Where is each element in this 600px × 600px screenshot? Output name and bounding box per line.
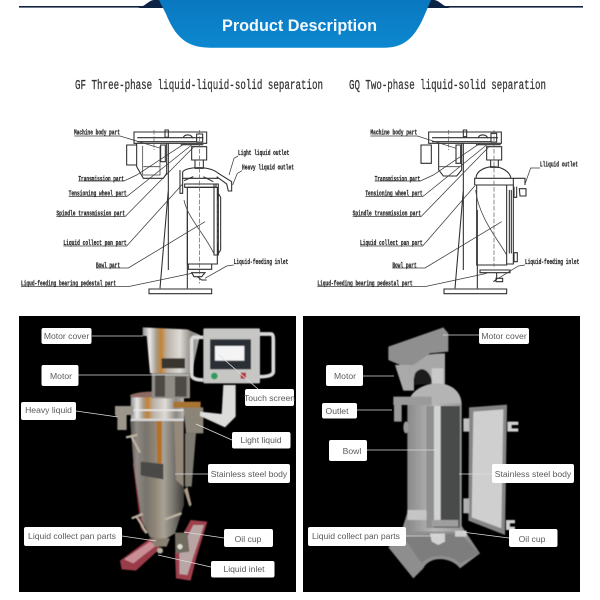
diagram: GQ two-phase centrifuge: Machine body part <box>370 129 417 137</box>
diagram: GF three-phase centrifuge: Spindle transmission part <box>56 211 125 219</box>
clamps <box>126 435 182 533</box>
top collar <box>130 391 183 401</box>
leader lines <box>76 336 258 567</box>
label: Heavy liquid <box>21 402 76 420</box>
label: Motor <box>42 365 78 386</box>
label: Stainless steel body: Stainless steel body <box>495 469 572 479</box>
diagram: GF three-phase centrifuge: Liquid collect pan part <box>63 240 127 248</box>
motor <box>395 365 414 391</box>
label: Motor cover: Motor cover <box>481 331 527 341</box>
label: Stainless steel body <box>208 464 290 483</box>
outlet <box>393 397 432 422</box>
outlet box <box>183 407 203 433</box>
diagram: GF three-phase centrifuge: Machine body part <box>74 129 120 137</box>
dome <box>408 383 462 405</box>
head <box>388 327 448 365</box>
diagram: GQ two-phase centrifuge: Liqud-feeding bearing pedestal part <box>317 281 413 289</box>
label: Heavy liquid: Heavy liquid <box>25 405 72 415</box>
bowl window <box>427 406 460 528</box>
diagram: GF three-phase centrifuge: Liqud-feeding bearing pedestal part <box>21 281 116 289</box>
label: Motor <box>326 365 363 386</box>
label: Liquid collect pan parts <box>308 527 406 546</box>
touch screen unit <box>192 328 273 427</box>
label: Touch screen <box>244 389 295 406</box>
rear frame <box>133 463 145 533</box>
label: Stainless steel body <box>492 464 574 483</box>
label: Liquid inlet: Liquid inlet <box>223 564 265 574</box>
diagram: GF three-phase centrifuge: Transmission part <box>78 176 124 184</box>
label: Touch screen: Touch screen <box>244 393 295 403</box>
leader lines <box>357 335 509 538</box>
label: Oil cup <box>224 529 273 547</box>
photo: stainless centrifuge <box>115 327 207 581</box>
motor cover <box>143 327 200 373</box>
door <box>468 405 507 535</box>
label: Motor: Motor <box>50 371 72 381</box>
label: Oil cup <box>509 529 558 547</box>
left foot <box>120 538 162 571</box>
diagram: GQ two-phase centrifuge: Transmission part <box>375 176 420 184</box>
label: Outlet <box>322 403 357 418</box>
label: Oil cup: Oil cup <box>519 534 546 544</box>
label: Bowl: Bowl <box>343 446 361 456</box>
label: Liquid inlet <box>211 561 274 578</box>
label: Liquid collect pan parts: Liquid collect pan parts <box>312 531 400 541</box>
panel: render of GQ machine <box>303 316 580 592</box>
side arm <box>200 385 236 427</box>
label: Bowl <box>329 440 367 461</box>
neck <box>152 373 190 398</box>
panel: photo of GF machine <box>19 316 296 592</box>
label: Liquid collect pan parts <box>24 527 122 546</box>
diagram: GF three-phase centrifuge: Heavy liquid outlet <box>242 164 294 172</box>
handles <box>192 337 203 380</box>
label: Motor cover <box>479 328 529 344</box>
banner: Product Description: Product Description <box>222 16 377 35</box>
valves <box>407 510 427 520</box>
door clips <box>506 422 518 530</box>
arch under head <box>408 353 445 385</box>
label: Light liquid: Light liquid <box>240 435 282 445</box>
oil cup <box>455 531 467 537</box>
banner: Product Description <box>159 0 431 48</box>
label: Stainless steel body: Stainless steel body <box>211 469 288 479</box>
diagram: GF three-phase centrifuge: Liquid-feeding inlet <box>234 259 288 267</box>
label: Light liquid <box>232 432 290 448</box>
oil cup and base parts <box>175 533 189 553</box>
label: Liquid collect pan parts: Liquid collect pan parts <box>28 531 116 541</box>
diagram: GQ two-phase centrifuge: Spindle transmission part <box>353 211 421 219</box>
diagram: GQ two-phase centrifuge: Lliquid outlet <box>540 162 578 170</box>
diagram: GF three-phase centrifuge: Light liquid outlet <box>238 150 289 158</box>
header rule <box>19 0 583 8</box>
render: grey centrifuge <box>388 327 507 578</box>
body <box>130 420 184 541</box>
diagram: GF three-phase centrifuge: Tensioning wheel part <box>69 191 127 199</box>
label: Motor: Motor <box>334 371 356 381</box>
label: Oil cup: Oil cup <box>235 534 262 544</box>
label: Motor cover <box>42 328 92 344</box>
right foot <box>175 520 207 581</box>
diagram: GQ two-phase centrifuge: Tensioning wheel part <box>365 191 423 199</box>
heavy outlet <box>115 406 133 430</box>
diagram: GQ two-phase centrifuge: Liquid collect pan part <box>360 240 423 248</box>
control box <box>203 328 260 383</box>
diagram: GQ two-phase centrifuge: Bowl part <box>392 262 417 270</box>
diagram: GQ two-phase centrifuge <box>317 129 579 294</box>
diagram: GF three-phase centrifuge <box>21 129 294 294</box>
diagram: GF three-phase centrifuge: Bowl part <box>96 262 120 270</box>
body <box>407 403 462 532</box>
label: Outlet: Outlet <box>326 406 349 416</box>
title: GF separation: GF Three-phase liquid-liquid-solid separation <box>75 79 323 94</box>
label: Motor cover: Motor cover <box>44 331 89 341</box>
base <box>388 507 480 578</box>
